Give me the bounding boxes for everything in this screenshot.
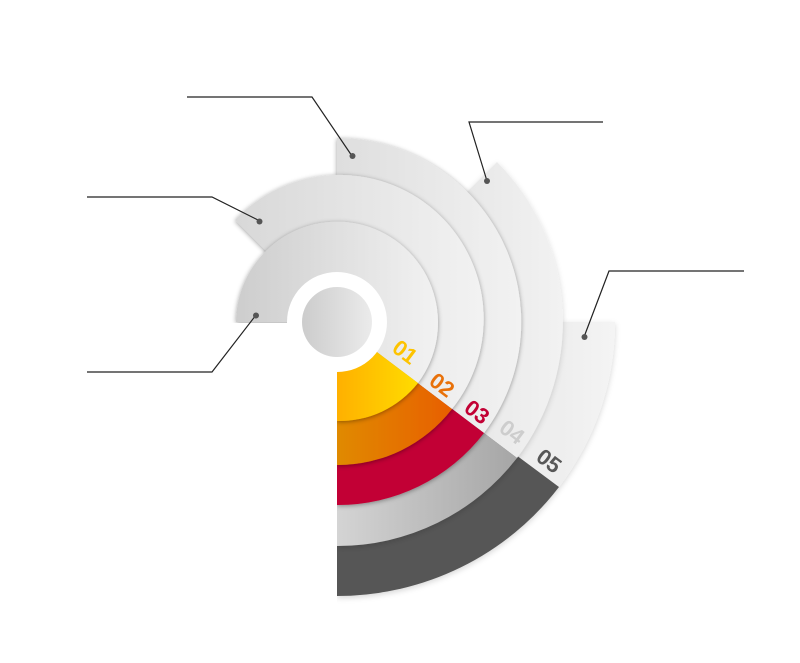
ring 5	[337, 322, 615, 596]
ring 3	[337, 138, 521, 505]
label 05: 05	[532, 444, 566, 478]
label 02: 02	[425, 368, 459, 402]
label 03: 03	[460, 395, 494, 429]
label 04: 04	[495, 415, 530, 450]
callout line: ring 1	[87, 312, 259, 372]
label 01: 01	[388, 335, 422, 369]
white mask hiding shadows left of the coloured quadrant	[190, 323, 337, 623]
ring 4	[337, 162, 563, 546]
callout line: ring 4	[469, 122, 603, 184]
callout line: ring 3	[187, 97, 356, 159]
ring 1	[236, 222, 438, 421]
centre grey circle	[302, 287, 372, 357]
callout line: ring 2	[87, 197, 262, 224]
white inner circle	[287, 272, 387, 372]
callout line: ring 5	[582, 271, 744, 340]
ring 2	[235, 175, 484, 465]
